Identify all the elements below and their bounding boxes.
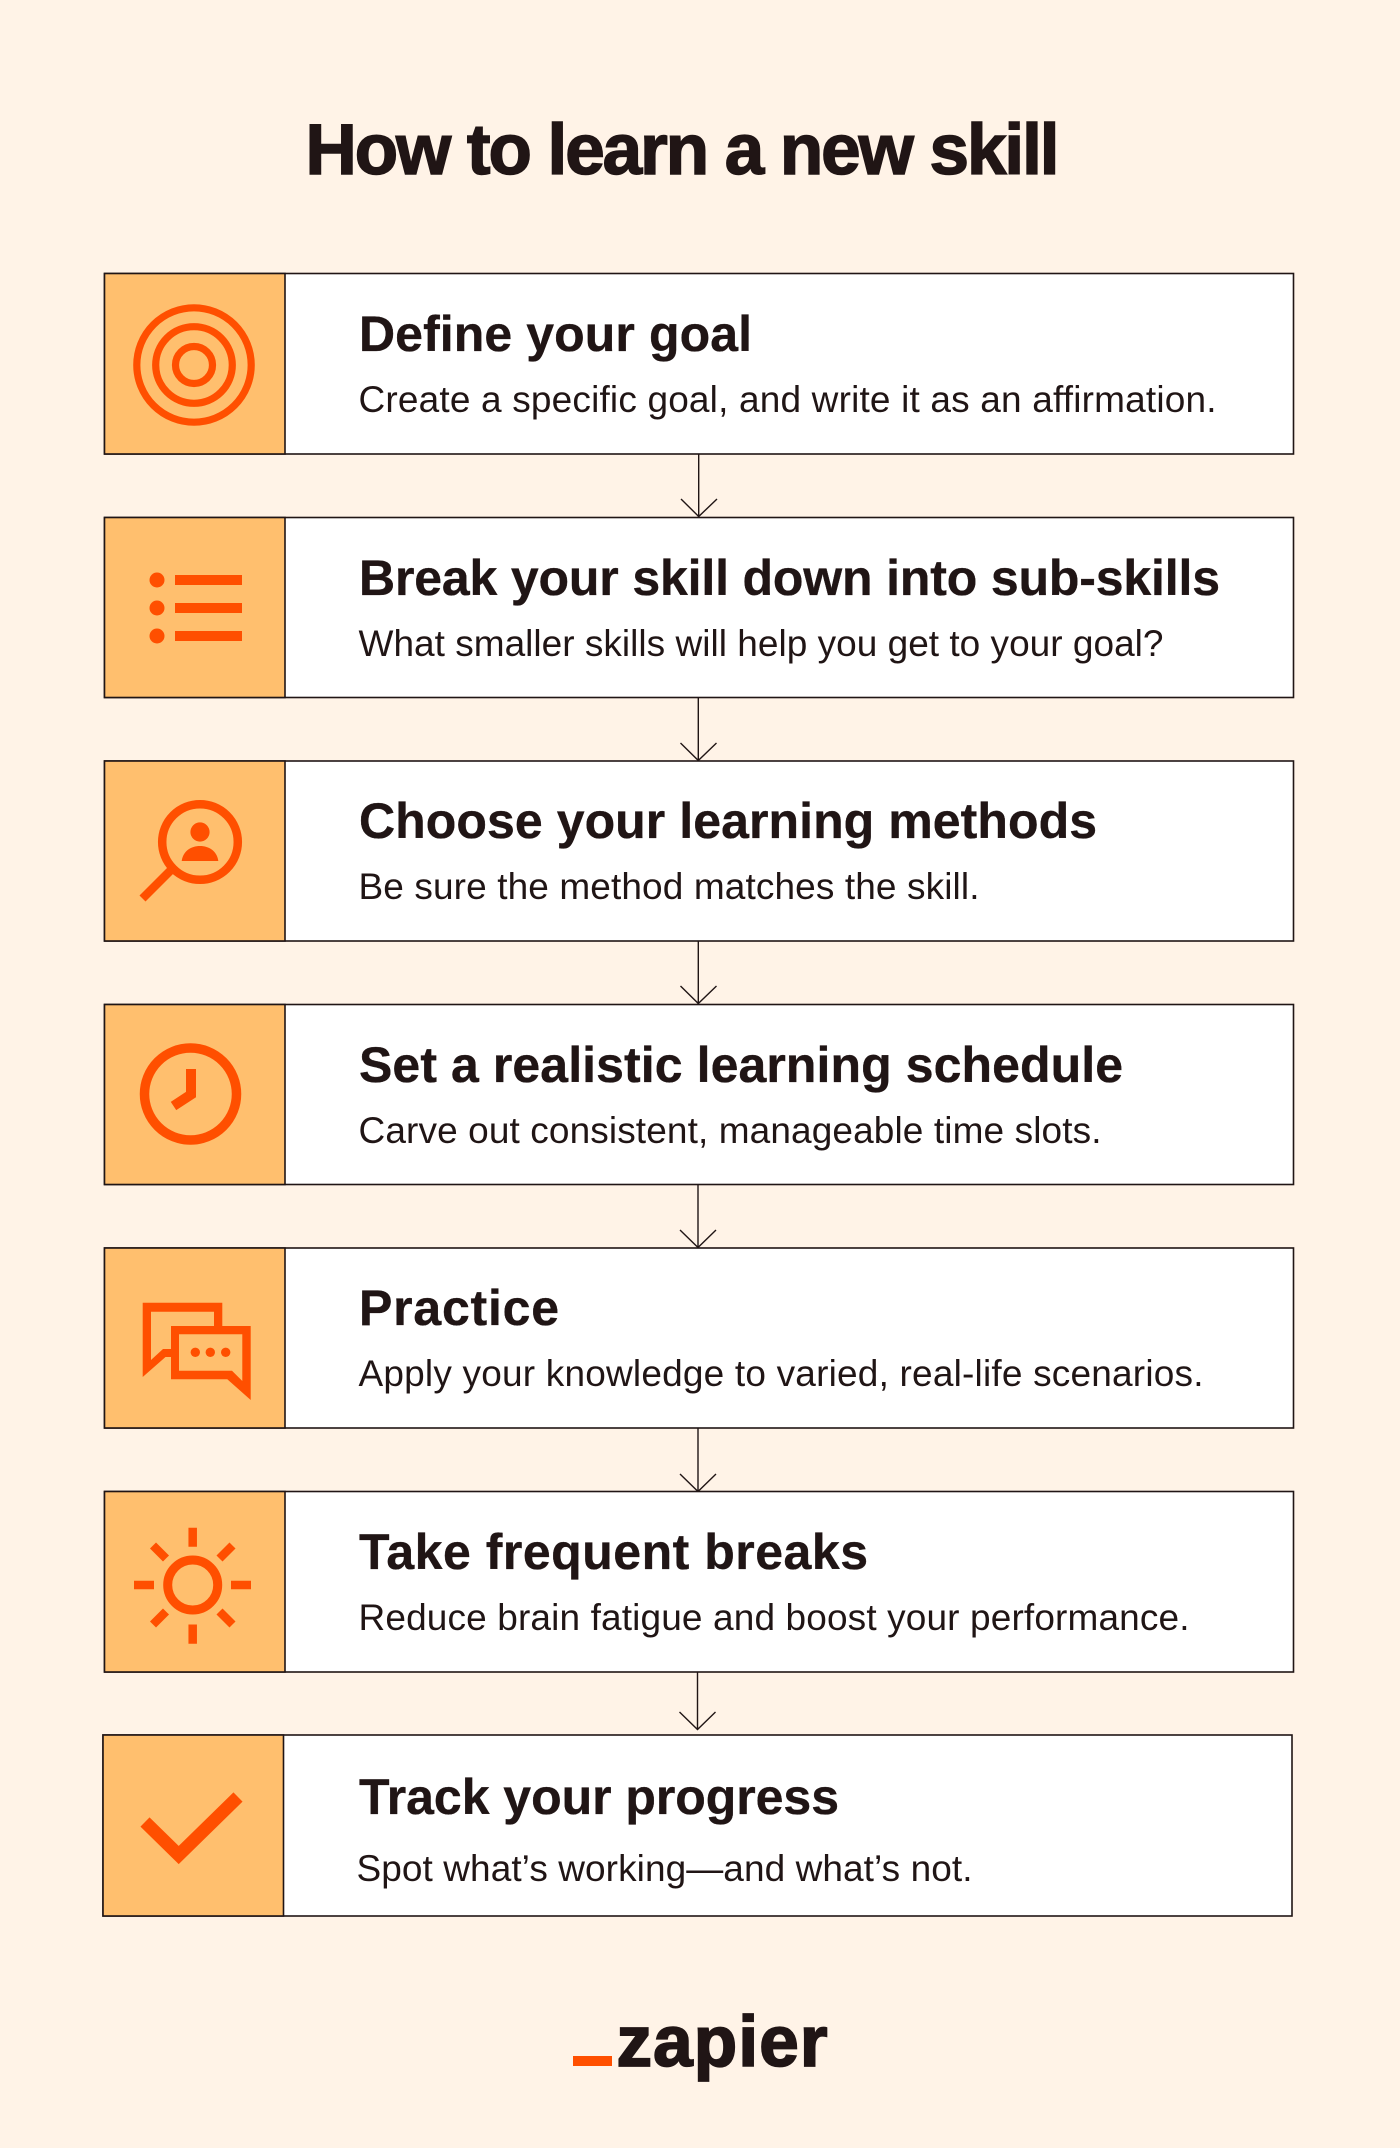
arrow: step 4 to 5 xyxy=(680,1184,716,1248)
arrow: step 2 to 3 xyxy=(680,698,716,760)
heading: realistic schedule: Set a realistic learning schedule xyxy=(359,1037,1123,1093)
heading: choose learning methods: Choose your learning methods xyxy=(359,793,1097,849)
panel: step 6 breaks xyxy=(104,1492,1294,1672)
icon: check mark xyxy=(145,1797,238,1855)
heading: break your skill down: Break your skill down into sub-skills xyxy=(359,550,1220,606)
icon: list xyxy=(150,572,242,644)
arrow: step 6 to 7 xyxy=(680,1672,716,1730)
description: method matches skill: Be sure the method matches the skill. xyxy=(358,866,980,907)
icon: clock xyxy=(144,1048,236,1140)
heading: track progress: Track your progress xyxy=(359,1769,839,1825)
arrow: step 5 to 6 xyxy=(680,1428,716,1492)
panel: step 5 practice xyxy=(104,1248,1294,1428)
panel: step 1 define your goal xyxy=(104,274,1294,454)
panel: step 3 learning methods xyxy=(104,761,1294,941)
description: time slots: Carve out consistent, manageable time slots. xyxy=(358,1110,1102,1151)
icon: chat bubbles xyxy=(143,1303,251,1400)
title: How to learn a new skill xyxy=(306,111,1060,190)
icon: target xyxy=(137,308,251,422)
icon: sun xyxy=(134,1528,251,1644)
heading: define your goal: Define your goal xyxy=(359,306,752,362)
heading: frequent breaks: Take frequent breaks xyxy=(359,1524,868,1580)
heading: practice: Practice xyxy=(359,1280,559,1336)
description: what's working: Spot what’s working—and what’s not. xyxy=(356,1848,972,1889)
arrow: step 3 to 4 xyxy=(680,941,716,1004)
description: smaller skills: What smaller skills will help you get to your goal? xyxy=(358,623,1164,664)
panel: step 7 track progress xyxy=(103,1735,1292,1916)
icon: magnifier with person xyxy=(142,804,238,898)
description: real-life scenarios: Apply your knowledge to varied, real-life scenarios. xyxy=(358,1353,1204,1394)
description: define your goal: Create a specific goal, and write it as an affirmation. xyxy=(358,379,1216,420)
arrow: step 1 to 2 xyxy=(681,454,717,516)
logo: zapier: zapier xyxy=(616,2003,828,2082)
panel: step 4 schedule xyxy=(104,1004,1294,1184)
description: reduce fatigue: Reduce brain fatigue and boost your performance. xyxy=(358,1597,1190,1638)
panel: step 2 break down into sub-skills xyxy=(104,518,1294,698)
